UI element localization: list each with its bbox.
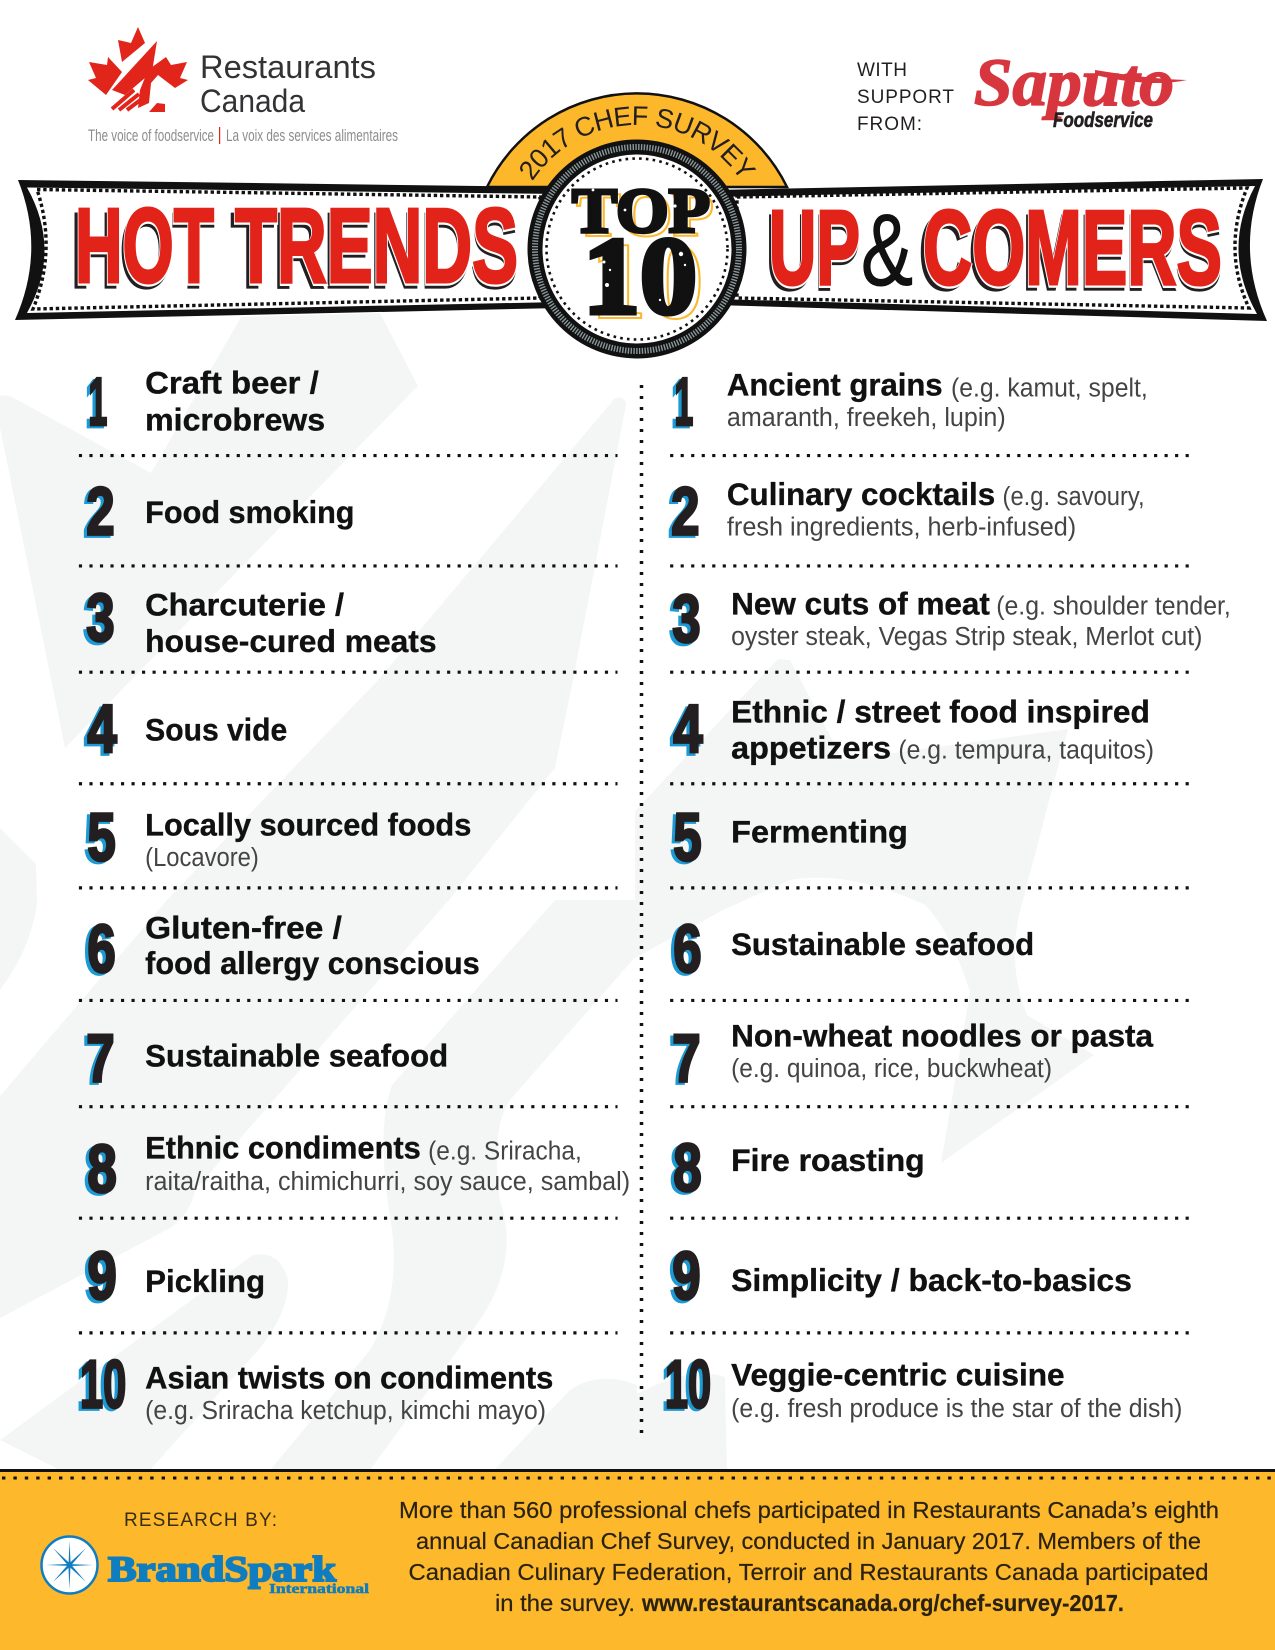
item 3: (e.g. shoulder tender, [996, 590, 1231, 620]
heading: HOT TRENDS: HOT [75, 187, 214, 305]
text: survey description: www.restaurantscanada.org/chef-survey-2017. [641, 1590, 1124, 1616]
item 9: Simplicity / back-to-basics [731, 1262, 1132, 1298]
text: survey description: Canadian Culinary Federation, Terroir and Restaurants Canada participated [408, 1559, 1208, 1585]
item 10: Veggie-centric cuisine [731, 1356, 1065, 1392]
item 1: Craft beer / [145, 364, 319, 400]
heading: UP&COMERS: & [861, 193, 913, 307]
item 4 [670, 692, 1154, 769]
text: 10: 10 [590, 220, 704, 342]
item 3: Charcuterie / [145, 586, 344, 622]
item 3 [83, 581, 437, 659]
banner: up and comers [715, 179, 1267, 321]
icon: maple leaf with fork [88, 27, 188, 112]
item 6: Sustainable seafood [731, 926, 1034, 962]
item 3 [669, 582, 1231, 659]
item 2: 2 [668, 477, 696, 552]
item 3: 3 [83, 583, 112, 658]
item 9: 9 [669, 1241, 697, 1316]
item 10 [662, 1348, 1182, 1425]
item 5: Locally sourced foods [145, 806, 471, 842]
logo: Restaurants Canada [88, 27, 398, 145]
panel: up and comers list [662, 365, 1231, 1425]
item 10: (e.g. Sriracha ketchup, kimchi mayo) [145, 1395, 546, 1425]
logo: Restaurants Canada: Restaurants [200, 49, 376, 85]
item 8 [84, 1129, 630, 1209]
logo: Saputo Foodservice: Foodservice [1053, 109, 1153, 132]
arch: 2017 chef survey: 2017 CHEF SURVEY [520, 106, 756, 180]
item 9: 9 [84, 1241, 114, 1316]
item 1: 1 [674, 365, 693, 440]
item 1: 1 [671, 367, 690, 442]
item 1 [85, 364, 325, 442]
item 4: appetizers [731, 729, 891, 765]
item 2 [83, 474, 355, 552]
column divider [640, 385, 643, 1440]
text: survey description: in the survey. [495, 1590, 635, 1616]
item 10: 10 [80, 1348, 126, 1423]
item 10: (e.g. fresh produce is the star of the dish) [731, 1393, 1182, 1423]
item 7: 7 [86, 1021, 115, 1096]
item 6 [670, 912, 1034, 989]
item 7 [83, 1021, 448, 1099]
item 7: 7 [672, 1021, 701, 1096]
item 7: (e.g. quinoa, rice, buckwheat) [731, 1053, 1052, 1083]
heading: HOT TRENDS: TRENDS [235, 188, 518, 306]
item 10: 10 [665, 1348, 711, 1423]
logo: Restaurants Canada: La voix des services alimentaires [226, 126, 398, 145]
item 5 [84, 801, 471, 878]
item 7: 7 [669, 1024, 697, 1099]
item 6: 6 [84, 914, 113, 989]
item 10: 10 [77, 1350, 123, 1425]
item 8: (e.g. Sriracha, [428, 1135, 582, 1165]
item 5: 5 [673, 801, 702, 876]
item 8: 8 [673, 1131, 702, 1206]
item 10: 10 [662, 1350, 708, 1425]
text: TOP: TOP [576, 179, 714, 250]
item 5: 5 [84, 803, 113, 878]
item 5: 5 [670, 803, 699, 878]
item 2 [668, 474, 1145, 552]
logo: Restaurants Canada: The voice of foodservice [88, 126, 214, 145]
item 2: 2 [86, 474, 115, 549]
item 6 [84, 909, 480, 989]
item 9 [669, 1239, 1132, 1316]
sponsor: with support from Saputo: WITH [857, 60, 907, 81]
item 6: 6 [673, 912, 702, 987]
item 6: food allergy conscious [145, 945, 480, 981]
item 8: 8 [87, 1132, 117, 1207]
item 4: Ethnic / street food inspired [731, 694, 1150, 730]
banner: hot trends [15, 180, 560, 320]
sponsor: with support from Saputo: FROM: [857, 114, 922, 135]
item 1: 1 [85, 367, 104, 442]
logo: BrandSpark International: International [269, 1582, 369, 1597]
item 2: fresh ingredients, herb-infused) [727, 511, 1076, 541]
item 9: 9 [87, 1239, 117, 1314]
heading: HOT TRENDS [71, 187, 518, 310]
dotted row rules [79, 456, 1196, 1333]
item 4: Sous vide [145, 712, 287, 748]
item 4: 4 [670, 694, 700, 769]
item 6: 6 [87, 912, 116, 987]
item 7: Non-wheat noodles or pasta [731, 1018, 1153, 1054]
item 1: (e.g. kamut, spelt, [951, 373, 1148, 403]
heading: HOT TRENDS: TRENDS [231, 192, 518, 310]
text: survey description: annual Canadian Chef Survey, conducted in January 2017. Members of the [416, 1528, 1201, 1554]
panel: hot trends list [77, 364, 630, 1425]
item 3: house-cured meats [145, 623, 437, 659]
item 2: Culinary cocktails [727, 476, 995, 512]
item 6: 6 [670, 914, 699, 989]
item 10 [77, 1348, 553, 1425]
item 5 [670, 801, 908, 878]
item 5: Fermenting [731, 814, 908, 850]
logo: Restaurants Canada: Canada [200, 83, 305, 119]
item 10: Asian twists on condiments [145, 1360, 553, 1396]
heading: HOT TRENDS: HOT [71, 192, 214, 310]
heading: HOT TRENDS: TRENDS [235, 187, 518, 305]
text: survey description: More than 560 professional chefs participated in Restaurants Canada’s eighth [399, 1497, 1219, 1523]
item 7 [669, 1018, 1153, 1099]
item 1: microbrews [145, 401, 325, 437]
item 4: 4 [84, 694, 114, 769]
text: survey description [399, 1497, 1219, 1616]
item 8: raita/raitha, chimichurri, soy sauce, sambal) [145, 1166, 630, 1196]
item 8: 8 [84, 1134, 114, 1209]
panel: footer [0, 1469, 1275, 1650]
logo: BrandSpark International [42, 1536, 369, 1597]
heading: HOT TRENDS: HOT [75, 188, 214, 306]
badge: top 10 [535, 147, 739, 351]
item 2: 2 [671, 474, 700, 549]
item 8: 8 [670, 1133, 699, 1208]
sponsor: with support from Saputo [857, 44, 1187, 135]
sponsor: with support from Saputo: SUPPORT [857, 87, 954, 108]
item 3: 3 [86, 581, 115, 656]
logo: Saputo Foodservice: Saputo [974, 44, 1174, 120]
item 7: 7 [83, 1024, 112, 1099]
item 4: 4 [87, 692, 117, 767]
item 6: Gluten-free / [145, 909, 342, 945]
heading: UP&COMERS: UP [766, 194, 860, 312]
item 4: (e.g. tempura, taquitos) [898, 734, 1154, 764]
heading: UP&COMERS: UP [769, 189, 860, 307]
item 2: Food smoking [145, 494, 355, 530]
heading: UP&COMERS: UP [769, 190, 860, 308]
item 1: 1 [88, 365, 107, 440]
item 9 [84, 1239, 265, 1316]
item 4 [84, 692, 287, 769]
item 5: (Locavore) [145, 842, 259, 872]
item 1 [671, 365, 1148, 442]
item 8: Ethnic condiments [145, 1129, 421, 1165]
item 7: Sustainable seafood [145, 1038, 448, 1074]
item 1: Ancient grains [727, 367, 943, 403]
item 1: amaranth, freekeh, lupin) [727, 402, 1006, 432]
text: TOP: TOP [572, 175, 710, 246]
item 8 [670, 1131, 925, 1208]
logo: BrandSpark International: BrandSpark [108, 1549, 336, 1589]
background maple leaf watermark [0, 313, 1094, 1470]
item 5: 5 [87, 801, 116, 876]
item 3: New cuts of meat [731, 585, 990, 621]
item 2: 2 [83, 477, 112, 552]
item 9: Pickling [145, 1263, 265, 1299]
text: research by: RESEARCH BY: [124, 1510, 277, 1531]
item 8: Fire roasting [731, 1142, 925, 1178]
item 4: 4 [673, 692, 703, 767]
item 9: 9 [672, 1239, 701, 1314]
heading: UP&COMERS [766, 189, 1222, 312]
item 2: (e.g. savoury, [1003, 481, 1145, 511]
item 3: 3 [669, 584, 697, 659]
text: 10: 10 [583, 215, 697, 337]
item 3: 3 [672, 582, 701, 657]
item 3: oyster steak, Vegas Strip steak, Merlot cut) [731, 621, 1202, 651]
